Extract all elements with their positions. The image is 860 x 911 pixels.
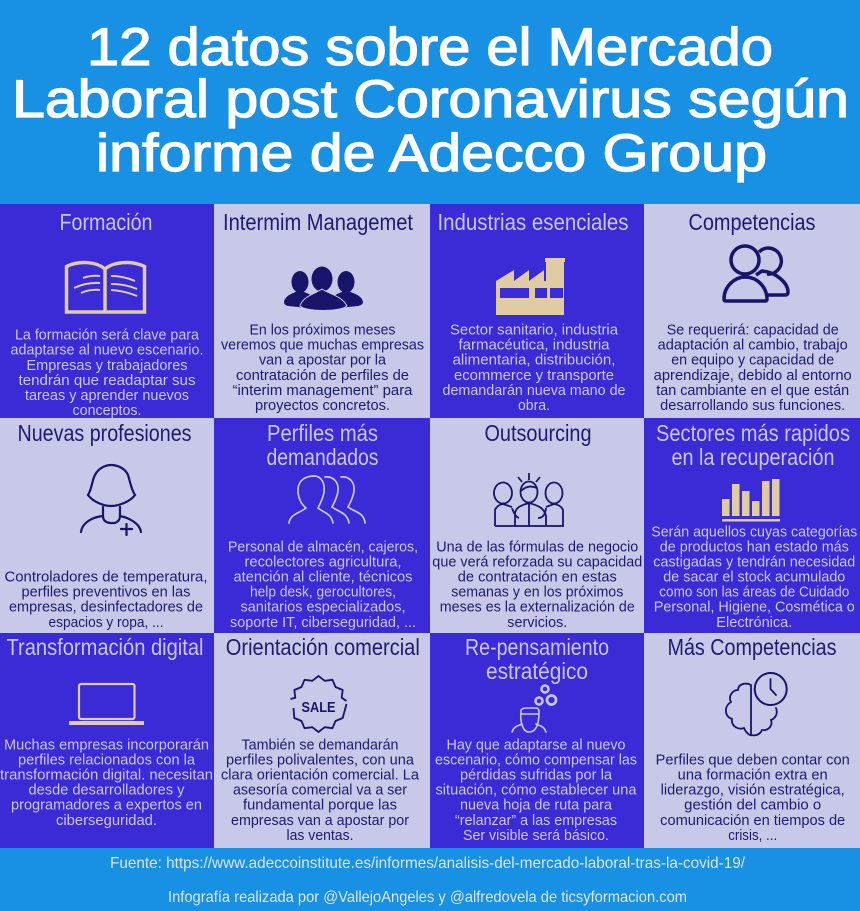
text block: de contratación en estas — [458, 569, 617, 585]
text block: una formación extra en — [678, 768, 828, 784]
text block: crisis, ... — [728, 828, 777, 844]
text block: “interim management” para — [232, 383, 413, 399]
text block: recolectores agricultura, — [244, 554, 402, 570]
text block: Se requerirá: capacidad de — [667, 322, 839, 338]
text block: Electrónica. — [716, 615, 792, 631]
text block: en equipo y capacidad de — [671, 353, 834, 369]
title: 12 datos sobre el Mercado — [87, 18, 773, 77]
heading: Competencias: Competencias — [688, 209, 816, 235]
text block: En los próximos meses — [250, 322, 396, 338]
icon: team meeting — [494, 473, 563, 526]
text block: tan cambiante en el que están — [656, 383, 849, 399]
text block: de productos han estado más — [660, 539, 849, 555]
text block: las ventas. — [286, 828, 354, 844]
heading: Sectores más rapidos en la recuperación — [656, 420, 850, 470]
panel: Industrias esenciales — [430, 204, 644, 418]
heading: Orientación comercial: Orientación comercial — [226, 634, 420, 660]
text block: “relanzar” a las empresas — [455, 813, 617, 829]
text block: Empresas y trabajadores — [26, 358, 188, 374]
heading: Perfiles más demandados — [266, 420, 378, 470]
text block — [4, 569, 208, 631]
text block: También se demandarán — [242, 737, 398, 753]
text block — [221, 737, 420, 844]
text block: liderazgo, visión estratégica, — [661, 783, 845, 799]
text block: escenario, cómo compensar las — [435, 752, 637, 768]
text block: pérdidas sufridas por la — [460, 768, 613, 784]
text block: meses es la externalización de — [440, 600, 635, 616]
icon: bar chart — [722, 479, 780, 522]
panel: Sectores más rapidos — [644, 418, 860, 633]
text block: Perfiles que deben contar con — [656, 752, 850, 768]
text block: soporte IT, ciberseguridad, ... — [230, 615, 416, 631]
heading: Perfiles más demandados: demandados — [266, 444, 378, 470]
panel: Re-pensamiento estratégico — [430, 633, 644, 848]
heading: Sectores más rapidos en la recuperación: en la recuperación — [672, 444, 834, 470]
text block: Una de las fórmulas de negocio — [436, 539, 638, 555]
text block: perfiles preventivos en las — [22, 584, 190, 600]
text block: obra. — [518, 398, 550, 414]
text block: perfiles relacionados con la — [18, 752, 196, 768]
text block: semanas y en los próximos — [451, 584, 623, 600]
text block — [228, 539, 418, 631]
text block: demandarán nueva mano de — [442, 383, 626, 399]
text block: programadores a expertos en — [11, 798, 202, 814]
icon: factory — [496, 258, 566, 315]
text block: comunicación en tiempos de — [660, 813, 845, 829]
text block: asesoría comercial va a ser — [233, 783, 407, 799]
heading: Transformación digital: Transformación digital — [6, 634, 204, 660]
panel: Outsourcing — [430, 418, 644, 633]
text block: alimentaria, distribución, — [452, 353, 616, 369]
text block: conceptos. — [72, 403, 142, 419]
text block: ecommerce y transporte — [454, 368, 614, 384]
text block: desde desarrolladores y — [28, 783, 185, 799]
text block: empresas van a apostar por — [231, 813, 409, 829]
footer: sources and credits: Fuente: https://www.adeccoinstitute.es/informes/analisis-del-mercado-laboral-tras-la-covid-19/ — [110, 855, 746, 872]
title: informe de Adecco Group — [96, 124, 767, 183]
text block: Sector sanitario, industria — [450, 322, 619, 338]
text block: Hay que adaptarse al nuevo — [446, 737, 626, 753]
text block — [651, 524, 857, 631]
text block: Ser visible será básico. — [463, 828, 609, 844]
text block — [10, 328, 204, 419]
text block: atención al cliente, técnicos — [234, 569, 412, 585]
heading: Re-pensamiento estratégico — [465, 634, 609, 684]
text block: que verá reforzada su capacidad — [432, 554, 642, 570]
text block: proyectos concretos. — [255, 398, 390, 414]
heading: Perfiles más demandados: Perfiles más — [267, 420, 378, 446]
icon: three profiles — [289, 476, 365, 523]
text block: servicios. — [507, 615, 567, 631]
icon: sale badge — [290, 676, 346, 732]
heading: Re-pensamiento estratégico: estratégico — [486, 658, 588, 684]
text block — [0, 737, 213, 829]
text block: La formación será clave para — [15, 328, 200, 344]
footer: sources and credits — [110, 855, 746, 906]
title — [12, 18, 849, 183]
panel: Orientación comercial — [214, 633, 430, 848]
text block: veremos que muchas empresas — [221, 338, 424, 354]
panel: Interim Management — [214, 204, 430, 418]
text block: fundamental porque las — [243, 798, 397, 814]
icon: two people outline — [724, 246, 788, 301]
text block: adaptarse al nuevo escenario. — [10, 343, 204, 359]
text block: de sacar el stock acumulado — [663, 569, 845, 585]
text block: desarrollando sus funciones. — [660, 398, 845, 414]
text block: empresas, desinfectadores de — [9, 600, 203, 616]
text block — [654, 322, 852, 414]
footer: sources and credits: Infografía realizada por @VallejoAngeles y @alfredovela de ticsyformacion.com — [168, 889, 687, 906]
text block: ciberseguridad. — [56, 813, 157, 829]
text block: van a apostar por la — [259, 353, 387, 369]
panel: Más Competencias — [644, 633, 860, 848]
text block: tareas y aprender nuevos — [25, 388, 189, 404]
text block: espacios y ropa, ... — [48, 615, 164, 631]
text block: tendrán que readaptar sus — [18, 373, 196, 389]
text block: gestión del cambio o — [684, 798, 821, 814]
text block: como son las áreas de Cuidado — [659, 584, 849, 600]
heading: Formación: Formación — [60, 209, 152, 235]
text block: Personal, Higiene, Cosmética o — [654, 600, 855, 616]
panel: Formación — [0, 204, 214, 419]
text block — [432, 539, 642, 631]
text block: contratación de perfiles de — [236, 368, 409, 384]
heading: Más Competencias: Más Competencias — [668, 634, 836, 660]
text block: aprendizaje, debido al entorno — [654, 368, 852, 384]
text block: Personal de almacén, cajeros, — [228, 539, 418, 555]
icon: sale badge: SALE — [302, 699, 336, 716]
panel: Transformación digital — [0, 633, 214, 848]
panel: Perfiles más demandados — [214, 418, 430, 633]
icon: laptop — [69, 684, 144, 725]
icon: group of people — [284, 266, 363, 310]
panel: Nuevas profesiones — [0, 418, 214, 633]
text block: clara orientación comercial. La — [221, 768, 420, 784]
icon: head with gears — [512, 686, 556, 732]
text block — [442, 322, 626, 414]
text block — [221, 322, 424, 414]
text block: transformación digital. necesitan — [0, 768, 213, 784]
text block: help desk, gerocultores, — [250, 584, 396, 600]
text block: sanitarios especializados, — [240, 600, 406, 616]
text block: castigadas y tendrán necesidad — [653, 554, 855, 570]
title: Laboral post Coronavirus según — [12, 70, 849, 129]
heading: Outsourcing: Outsourcing — [484, 420, 592, 446]
text block: farmacéutica, industria — [458, 338, 610, 354]
text block — [656, 752, 850, 844]
icon: open book — [66, 263, 144, 312]
text block: situación, cómo establecer una — [436, 783, 637, 799]
text block — [435, 737, 637, 844]
text block: nueva hoja de ruta para — [460, 798, 613, 814]
heading: Industrias esenciales: Industrias esenciales — [438, 209, 628, 235]
heading: Intermim Managemet: Intermim Managemet — [223, 209, 414, 235]
icon: person with plus — [81, 465, 141, 535]
heading: Re-pensamiento estratégico: Re-pensamiento — [465, 634, 609, 660]
icon: brain with clock — [726, 673, 787, 735]
text block: Muchas empresas incorporarán — [4, 737, 209, 753]
text block: Serán aquellos cuyas categorías — [651, 524, 857, 540]
panel: Competencias — [644, 204, 860, 418]
text block: perfiles polivalentes, con una — [226, 752, 415, 768]
text block: Controladores de temperatura, — [4, 569, 208, 585]
heading: Nuevas profesiones: Nuevas profesiones — [18, 420, 192, 446]
text block: adaptación al cambio, trabajo — [658, 338, 848, 354]
